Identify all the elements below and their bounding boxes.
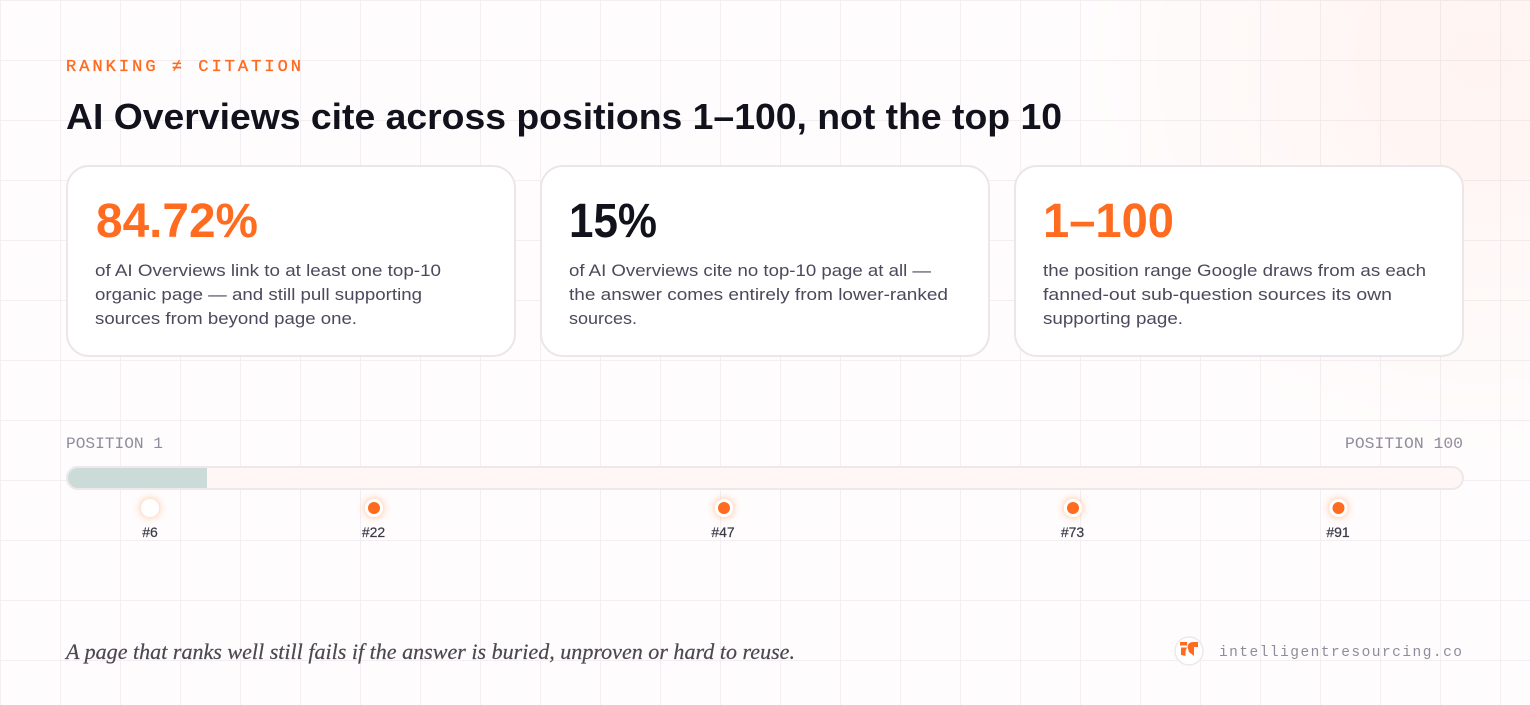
label: position 1: POSITION 1: [66, 435, 163, 453]
panel: 84.72% stat card: [67, 166, 515, 356]
stat: 84.72%: 84.72%: [96, 195, 258, 248]
marker: #91: [1326, 499, 1350, 540]
label: position 100: POSITION 100: [1345, 435, 1463, 453]
description: 84.72%: sources from beyond page one.: [95, 309, 357, 328]
title: AI Overviews cite across positions 1–100, not the top 10: [66, 96, 1062, 137]
description: 1–100: fanned-out sub-question sources its own: [1043, 285, 1392, 304]
marker: #73: #73: [1061, 524, 1084, 540]
panel: 1–100 stat card: [1015, 166, 1463, 356]
position scale chart: [66, 435, 1464, 540]
marker: #6: #6: [142, 524, 158, 540]
description: 15%: the answer comes entirely from lower-ranked: [569, 285, 948, 304]
description: 1–100: supporting page.: [1043, 309, 1183, 328]
description: 84.72%: [95, 261, 441, 328]
description: 1–100: the position range Google draws from as each: [1043, 261, 1426, 280]
marker: #91: #91: [1326, 524, 1350, 540]
marker: #22: [362, 499, 385, 540]
description: 84.72%: of AI Overviews link to at least one top-10: [95, 261, 441, 280]
description: 84.72%: organic page — and still pull supporting: [95, 285, 422, 304]
marker: #73: [1061, 499, 1084, 540]
position track: [66, 466, 1464, 490]
description: 15%: [569, 261, 948, 328]
panel: 15% stat card: [541, 166, 989, 356]
marker: #47: #47: [711, 524, 735, 540]
marker: #6: [141, 499, 159, 540]
marker: #22: #22: [362, 524, 385, 540]
description: 1–100: [1043, 261, 1426, 328]
icon: brand logo: [1175, 637, 1203, 665]
description: 15%: sources.: [569, 309, 637, 328]
stat: 1–100: 1–100: [1043, 195, 1174, 248]
brand url: intelligentresourcing.co: [1219, 645, 1462, 661]
eyebrow: RANKING ≠ CITATION: [66, 58, 301, 77]
description: 15%: of AI Overviews cite no top-10 page at all —: [569, 261, 931, 280]
stat: 15%: 15%: [569, 195, 657, 248]
footer quote: A page that ranks well still fails if the answer is buried, unproven or hard to reuse.: [64, 639, 795, 664]
marker: #47: [711, 499, 735, 540]
